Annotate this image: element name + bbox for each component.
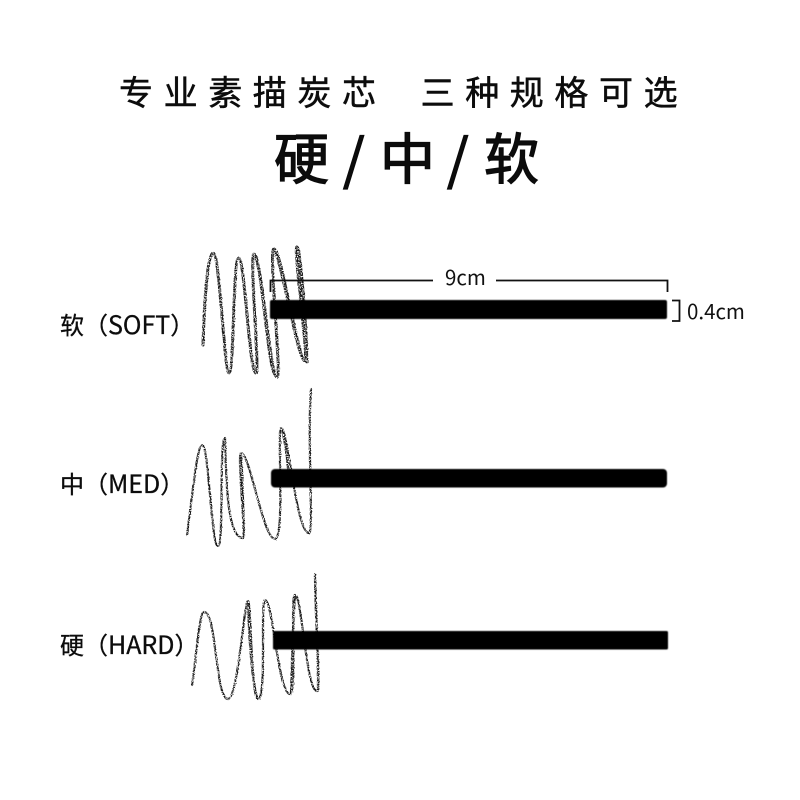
charcoal stick: soft xyxy=(270,300,667,319)
heading: hardness grades: / xyxy=(343,115,365,195)
heading: hardness grades: 硬 xyxy=(274,115,329,195)
scribble: medium charcoal sample xyxy=(187,389,311,546)
label: medium: 中（MED） xyxy=(60,465,184,501)
label: soft: 软（SOFT） xyxy=(60,306,194,342)
charcoal stick: hard xyxy=(273,631,668,650)
label: hard: 硬（HARD） xyxy=(60,626,198,662)
dimension label: 0.4cm: 0.4cm xyxy=(687,295,745,325)
heading: hardness grades xyxy=(274,115,539,195)
dimension line: 9cm length xyxy=(270,280,668,292)
heading: hardness grades: 中 xyxy=(380,115,435,195)
heading: hardness grades: 软 xyxy=(484,115,539,195)
title line: product description: 专业素描炭芯 三种规格可选 xyxy=(119,66,688,115)
dimension label: 9cm: 9cm xyxy=(445,261,486,291)
dimension bracket: 0.4cm thickness xyxy=(672,300,680,321)
charcoal stick: medium xyxy=(271,469,667,488)
scribble: hard charcoal sample xyxy=(192,574,318,699)
scribble: soft charcoal sample xyxy=(203,247,307,377)
heading: hardness grades: / xyxy=(447,115,469,195)
